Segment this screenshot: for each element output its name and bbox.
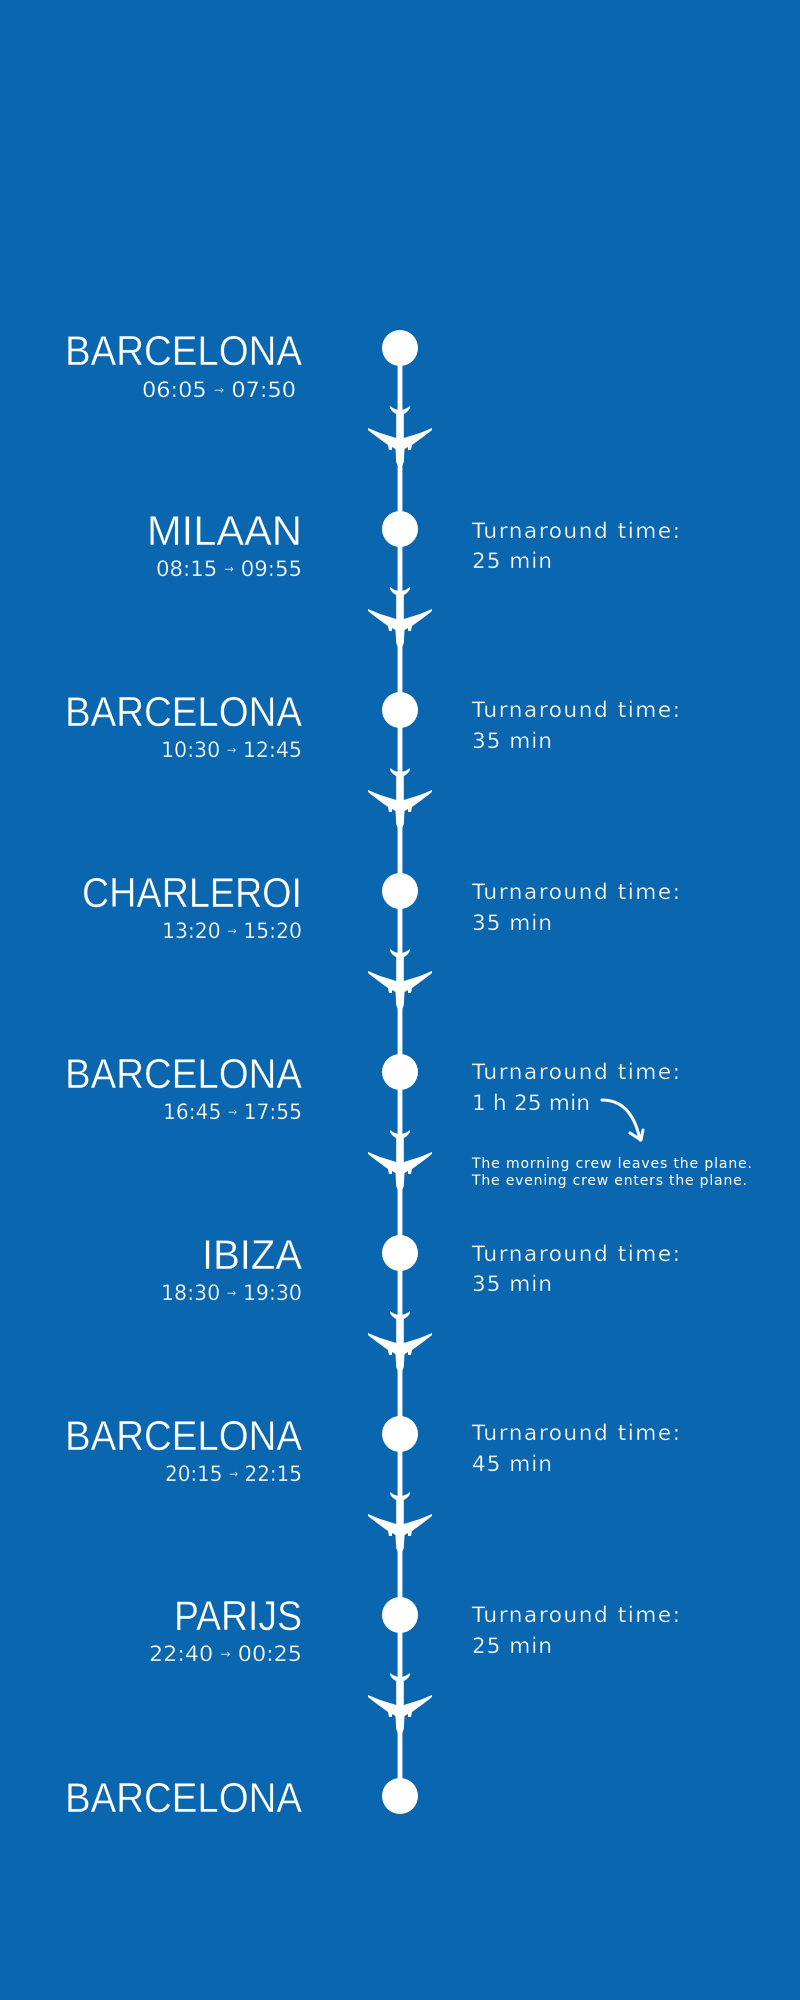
stop 4: Charleroi bbox=[82, 869, 680, 944]
crew note line 2: The evening crew enters the plane. bbox=[471, 1173, 747, 1189]
city name: BARCELONA bbox=[65, 1050, 302, 1097]
node bbox=[382, 1778, 418, 1814]
times: 16:45 bbox=[163, 1100, 225, 1125]
times: 13:20 bbox=[162, 919, 224, 944]
times: 22:40 bbox=[149, 1642, 211, 1667]
times: 20:15 bbox=[165, 1462, 227, 1487]
stop 2: Milaan bbox=[147, 507, 680, 582]
icon: plane bbox=[368, 1673, 432, 1739]
icon: plane bbox=[368, 587, 432, 653]
icon: plane bbox=[368, 768, 432, 834]
times: 15:20 bbox=[237, 919, 302, 944]
turnaround value: 25 min bbox=[472, 1634, 552, 1659]
city name: BARCELONA bbox=[65, 1412, 302, 1459]
node bbox=[382, 873, 418, 909]
city name: MILAAN bbox=[147, 507, 302, 554]
times: → bbox=[227, 743, 236, 757]
turnaround: Turnaround time: bbox=[471, 1060, 680, 1085]
city name: BARCELONA bbox=[65, 1774, 302, 1821]
icon: plane bbox=[368, 406, 432, 472]
turnaround value: 1 h 25 min bbox=[472, 1091, 590, 1116]
times: 12:45 bbox=[236, 738, 302, 763]
stop 1: Barcelona bbox=[65, 327, 418, 403]
turnaround: Turnaround time: bbox=[471, 698, 680, 723]
times: 22:15 bbox=[238, 1462, 302, 1487]
node bbox=[382, 692, 418, 728]
turnaround value: 35 min bbox=[472, 1272, 552, 1297]
city name: BARCELONA bbox=[65, 327, 302, 374]
turnaround value: 45 min bbox=[472, 1452, 552, 1477]
node bbox=[382, 330, 418, 366]
times: 10:30 bbox=[161, 738, 223, 763]
turnaround: Turnaround time: bbox=[471, 1421, 680, 1446]
city name: PARIJS bbox=[174, 1592, 302, 1639]
city name: IBIZA bbox=[202, 1231, 302, 1278]
turnaround value: 35 min bbox=[472, 911, 552, 936]
times: 18:30 bbox=[161, 1281, 223, 1306]
times: 08:15 bbox=[156, 557, 218, 582]
times: 19:30 bbox=[236, 1281, 302, 1306]
times: 06:05 bbox=[142, 378, 204, 403]
node bbox=[382, 1597, 418, 1633]
times: 07:50 bbox=[224, 378, 296, 403]
times: 00:25 bbox=[231, 1642, 302, 1667]
arrow bbox=[602, 1100, 643, 1140]
times: 09:55 bbox=[234, 557, 302, 582]
turnaround: Turnaround time: bbox=[471, 1603, 680, 1628]
times: → bbox=[220, 1647, 231, 1661]
stop 7: Barcelona bbox=[65, 1412, 680, 1487]
turnaround: Turnaround time: bbox=[471, 1242, 680, 1267]
node bbox=[382, 1416, 418, 1452]
icon: plane bbox=[368, 949, 432, 1015]
icon: plane bbox=[368, 1311, 432, 1377]
times: → bbox=[228, 1105, 237, 1119]
timeline line bbox=[398, 348, 402, 1796]
node bbox=[382, 1235, 418, 1271]
times: → bbox=[214, 383, 224, 397]
crew note: The morning crew leaves the plane. bbox=[471, 1156, 752, 1172]
times: → bbox=[227, 924, 237, 938]
icon: plane bbox=[368, 1492, 432, 1558]
turnaround: Turnaround time: bbox=[471, 880, 680, 905]
city name: BARCELONA bbox=[65, 688, 302, 735]
stop 9: Barcelona bbox=[65, 1774, 418, 1821]
stop 3: Barcelona bbox=[65, 688, 680, 763]
turnaround: Turnaround time: bbox=[471, 519, 680, 544]
turnaround value: 35 min bbox=[472, 729, 552, 754]
city name: CHARLEROI bbox=[82, 869, 302, 916]
times: 17:55 bbox=[237, 1100, 302, 1125]
node bbox=[382, 511, 418, 547]
times: → bbox=[224, 562, 234, 576]
icon: plane bbox=[368, 1130, 432, 1196]
turnaround value: 25 min bbox=[472, 549, 552, 574]
stop 5: Barcelona bbox=[65, 1050, 752, 1189]
times: → bbox=[229, 1467, 238, 1481]
stop 8: Parijs bbox=[149, 1592, 680, 1667]
times: → bbox=[227, 1286, 236, 1300]
stop 6: Ibiza bbox=[161, 1231, 680, 1306]
node bbox=[382, 1054, 418, 1090]
